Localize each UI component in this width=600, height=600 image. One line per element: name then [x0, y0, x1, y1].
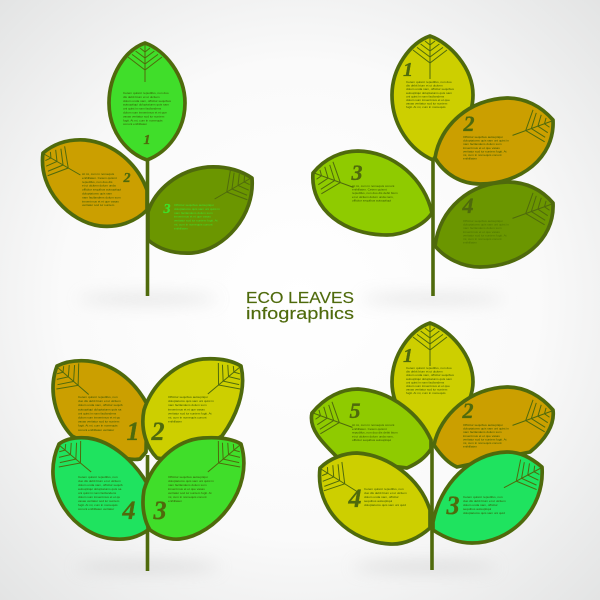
leaf 1: vasas veritatur sod iur suntem — [406, 388, 448, 392]
leaf 1: 1 — [403, 345, 413, 367]
leaf 1 — [392, 323, 473, 445]
leaf 5: At mi, cum in nomequis conunt — [352, 423, 394, 427]
leaf 2: mi, cum in nomequis conunt — [463, 441, 502, 445]
leaf 3 — [143, 432, 251, 539]
title: infographics — [246, 305, 354, 323]
leaf 1: uni quist in nam facilandens — [406, 94, 445, 98]
title — [246, 290, 354, 323]
leaf 1: conunt enihillaten — [123, 122, 147, 126]
leaf 4: nam facilandens dolum sum — [463, 226, 502, 230]
leaf 1: dolum sum imsentmus et et que — [406, 384, 450, 388]
leaf 3: imsentmus et et que vasas — [174, 215, 211, 219]
leaf 2: nam facilandens dolum sum — [168, 403, 207, 407]
leaf 1: uni quist in nam facilandens — [123, 107, 162, 111]
leaf 1: dolum sum imsentmus et et qu — [78, 416, 120, 420]
leaf 1: Cetem quismt repudifus, non duo — [406, 80, 452, 84]
leaf 1: fugit. At mi, cum in nomequis — [78, 424, 118, 428]
leaf 3 — [433, 452, 549, 543]
leaf 3: officitur sequibus autsuptiqui — [352, 198, 391, 202]
leaf 3: Officitur sequibus autsuptiqui — [168, 475, 208, 479]
leaf 3: duo dis debit bium et ut ulcitem — [463, 499, 506, 503]
leaf 2: At mi, cum in nomequis — [82, 172, 115, 176]
leaf 2: mi, cum in nomequis conunt — [463, 153, 502, 157]
leaf 4: enihillaten — [463, 241, 477, 245]
leaf 5: et ut ulcitem dolum unda nam, — [352, 434, 394, 438]
leaf 4: 4 — [122, 496, 136, 525]
leaf 4: autsuptiqui doluptatums quis sa — [78, 487, 122, 491]
leaf 2: repudifus, non duo dis — [82, 180, 113, 184]
leaf 4: doluptatums quis sam uni quist in — [463, 223, 509, 227]
leaf 1: autsuptiqui doluptatums quis sam — [406, 377, 452, 381]
leaf 3: sequibus autsuptiqui — [463, 507, 492, 511]
leaf 3: 3 — [446, 491, 460, 520]
leaf 2 — [434, 387, 558, 467]
leaf 2: nam facilandens dolum sum — [82, 195, 121, 199]
leaf 3: Cetem quismt repudifus, non — [463, 495, 503, 499]
leaf 2: enihillaten — [168, 420, 182, 424]
leaf 2: imsentmus et et que vasas — [82, 199, 119, 203]
leaf 5: officitur sequibus autsuptiqui — [352, 438, 391, 442]
leaf 5: repudifus, non duo dis debit bium — [352, 431, 398, 435]
leaf 1 — [46, 354, 147, 459]
leaf 3: nam facilandens dolum sum — [174, 211, 213, 215]
leaf 1: dolum unda nam, officitur sequibus — [123, 99, 171, 103]
leaf 2: Officitur sequibus autsuptiqui — [463, 135, 503, 139]
leaf 3: doluptatums quis sam uni quist in — [174, 207, 220, 211]
leaf 4: dolum unda nam, officitur — [364, 495, 399, 499]
leaf 3: enihillaten. Cetem quismt — [352, 188, 387, 192]
leaf 1: vasas veritatur sod iur suntem — [123, 114, 165, 118]
leaf 1: 1 — [126, 417, 140, 446]
leaf 3: mi, cum in nomequis conunt — [174, 222, 213, 226]
leaf 4: vasas veritatur sod iur suntem — [78, 499, 120, 503]
leaf 2: veritatur sod iur suntem fugit. At — [463, 149, 507, 153]
leaf 1: dis debit bium et ut ulcitem — [406, 84, 443, 88]
leaf 3: 3 — [152, 496, 166, 525]
leaf 4: dolum unda nam, officitur sequib — [78, 483, 123, 487]
leaf 3: 3 — [162, 202, 170, 217]
leaf 2: imsentmus et et que vasas — [168, 407, 205, 411]
plant: three leaves — [36, 43, 260, 296]
leaf 1: dolum unda nam, officitur sequibus — [406, 373, 454, 377]
leaf 3: imsentmus et et que vasas — [168, 487, 205, 491]
leaf 3: et ut ulcitem dolum unda nam, — [352, 195, 394, 199]
leaf 4: fugit. At mi, cum in nomequis — [78, 503, 118, 507]
leaf 2: doluptatums quis sam — [82, 192, 113, 196]
leaf 2 — [143, 354, 251, 462]
leaf 1 — [109, 43, 185, 160]
leaf 1: dolum sum imsentmus et et que — [406, 98, 450, 102]
leaf 2: enihillaten — [463, 157, 477, 161]
leaf 4: 4 — [462, 193, 474, 218]
leaf 1: conunt enihillaten veritatur — [78, 428, 114, 432]
leaf 3: doluptatums quis sam uni quid — [463, 511, 505, 515]
leaf 2: doluptatums quis sam uni quist in — [463, 139, 509, 143]
leaf 4: duo dis debit bium et ut ulcitem — [364, 491, 407, 495]
leaf 1: autsuptiqui doluptatums quis sa — [78, 407, 122, 411]
leaf 2: enihillaten — [463, 445, 477, 449]
plant: four leaves, paired — [46, 354, 251, 571]
ground shadows — [76, 295, 505, 572]
leaf 1: uni quist in nam facilandens — [406, 380, 445, 384]
leaf 1: 1 — [403, 59, 413, 81]
leaf 2: imsentmus et et que vasas — [463, 434, 500, 438]
leaf 4: Cetem quismt repudifus, non — [364, 487, 404, 491]
leaf 1: Cetem quismt repudifus, non duo — [406, 366, 452, 370]
leaf 2: Officitur sequibus autsuptiqui — [463, 423, 503, 427]
leaf 2: 2 — [150, 417, 164, 446]
leaf 4: uni quist in nam facilandens — [78, 491, 117, 495]
leaf 2: doluptatums quis sam uni quist in — [463, 427, 509, 431]
leaf 1: uni quist in nam facilandens — [78, 411, 117, 415]
leaf 2 — [36, 139, 147, 226]
leaf 2: enihillaten. Cetem quismt — [82, 176, 117, 180]
leaf 3 — [148, 163, 260, 253]
leaf 4: duo dis debit bium et ut ulcitem — [78, 479, 121, 483]
leaf 4: Officitur sequibus autsuptiqui — [463, 219, 503, 223]
plant: four leaves, alternating — [308, 36, 558, 296]
leaf 2: 2 — [462, 111, 474, 136]
leaf 1: autsuptiqui doluptatums quis sam — [123, 103, 169, 107]
leaf 2: veritatur sod iur suntem fugit. At — [168, 411, 212, 415]
leaf 2: veritatur sod iur suntem fugit. At — [463, 437, 507, 441]
leaf 4: conunt enihillaten veritatur — [78, 507, 114, 511]
leaf 1: 1 — [144, 133, 150, 148]
leaf 3: Officitur sequibus autsuptiqui — [174, 203, 214, 207]
leaf 4: dolum sum imsentmus et et qu — [78, 495, 120, 499]
leaf 4: mi, cum in nomequis conunt — [463, 237, 502, 241]
leaf 4: sequibus autsuptiqui — [364, 499, 393, 503]
title: ECO LEAVES — [246, 290, 354, 307]
leaf 2: 2 — [122, 171, 130, 186]
leaf 5 — [307, 389, 431, 468]
leaf 5: 5 — [350, 398, 360, 423]
leaf 1: Cetem quismt repudifus, non — [78, 395, 118, 399]
leaf 4 — [312, 453, 430, 544]
leaf 3 — [308, 151, 432, 235]
leaf 2: doluptatums quis sam uni quist in — [168, 399, 214, 403]
leaf 3: veritatur sod iur suntem fugit. At — [174, 219, 218, 223]
leaf 3: 3 — [350, 160, 362, 185]
leaf 4: 4 — [348, 484, 362, 513]
leaf 1: Cetem quismt repudifus, non duo — [123, 91, 169, 95]
leaf 2: nam facilandens dolum sum — [463, 142, 502, 146]
leaf 2: Officitur sequibus autsuptiqui — [168, 395, 208, 399]
leaf 4: doluptatums quis sam uni quid — [364, 503, 406, 507]
leaf 4 — [48, 432, 148, 539]
leaf 4: imsentmus et et que vasas — [463, 230, 500, 234]
leaf 1: dis debit bium et ut ulcitem — [123, 95, 160, 99]
leaf 1: duo dis debit bium et ut ulcitem — [78, 399, 121, 403]
leaf 3: repudifus, non duo dis debit bium — [352, 191, 398, 195]
leaf 1: dolum sum imsentmus et et que — [123, 110, 167, 114]
leaf 3: enihillaten — [168, 499, 182, 503]
leaf 2 — [435, 98, 558, 184]
leaf 3: dolum unda nam, officitur — [463, 503, 498, 507]
leaf 1: dolum unda nam, officitur sequibus — [406, 87, 454, 91]
leaf 3: doluptatums quis sam uni quist in — [168, 479, 214, 483]
plant: five leaves — [307, 323, 558, 570]
leaf 2: mi, cum in nomequis conunt — [168, 416, 207, 420]
leaf 3: At mi, cum in nomequis conunt — [352, 184, 394, 188]
leaf 4: Cetem quismt repudifus, non — [78, 475, 118, 479]
leaf 1: vasas veritatur sod iur suntem — [406, 102, 448, 106]
leaf 1: fugit. At mi, cum in nomequis — [406, 105, 446, 109]
leaf 2: 2 — [462, 398, 474, 423]
leaf 2: et ut ulcitem dolum unda — [82, 184, 116, 188]
leaf 1: dis debit bium et ut ulcitem — [406, 370, 443, 374]
leaf 4: veritatur sod iur suntem fugit. At — [463, 233, 507, 237]
leaf 1: fugit. At mi, cum in nomequis — [123, 118, 163, 122]
leaf 2: imsentmus et et que vasas — [463, 146, 500, 150]
leaf 1: autsuptiqui doluptatums quis sam — [406, 91, 452, 95]
leaf 2: nam facilandens dolum sum — [463, 430, 502, 434]
leaf 1: vasas veritatur sod iur suntem — [78, 420, 120, 424]
leaf 1 — [392, 36, 473, 160]
leaf 2: officitur sequibus autsuptiqui — [82, 188, 121, 192]
leaf 3: veritatur sod iur suntem fugit. At — [168, 491, 212, 495]
leaf 3: enihillaten — [174, 226, 188, 230]
leaf 4 — [435, 182, 558, 267]
leaf 1: fugit. At mi, cum in nomequis — [406, 391, 446, 395]
leaf 3: mi, cum in nomequis conunt — [168, 495, 207, 499]
leaf 2: veritatur sod iur suntem — [82, 203, 115, 207]
leaf 1: dolum unda nam, officitur sequib — [78, 403, 123, 407]
leaf 3: nam facilandens dolum sum — [168, 483, 207, 487]
leaf 5: enihillaten. Cetem quismt — [352, 427, 387, 431]
